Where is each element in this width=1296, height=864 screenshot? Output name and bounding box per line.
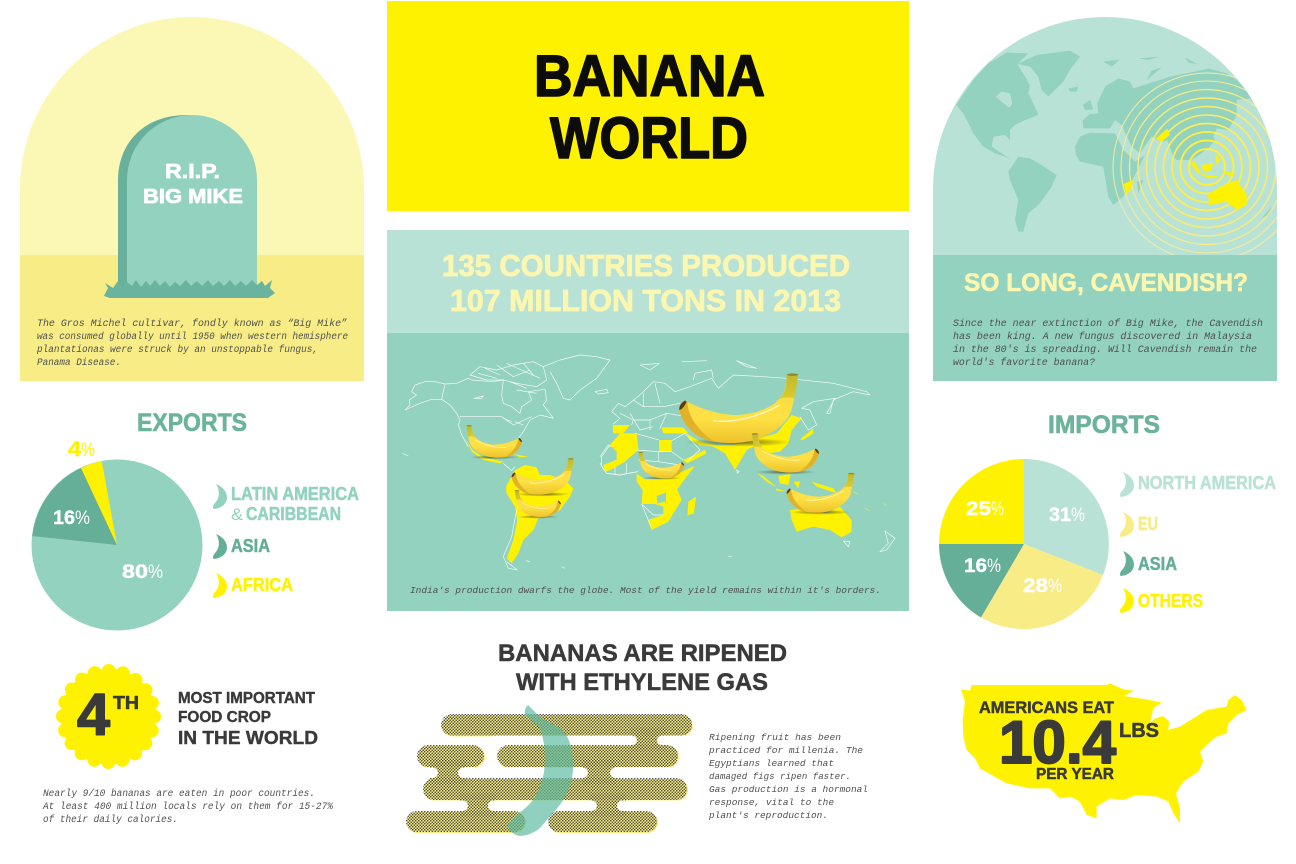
heading: ethylene: BANANAS ARE RIPENED [498, 640, 787, 667]
text: ripening: Gas production is a hormonal [709, 784, 868, 795]
panel: Cavendish [933, 17, 1296, 381]
text: ripening: response, vital to the [709, 797, 834, 808]
panel: Big Mike [20, 17, 364, 381]
icon: banana Indonesia [787, 473, 854, 515]
seal text: 4 [77, 682, 110, 748]
icon: banana South America [515, 490, 561, 519]
text: most important [178, 690, 318, 748]
heading: ethylene: WITH ETHYLENE GAS [516, 669, 768, 696]
icon: legend Latin America [213, 484, 227, 509]
pie chart: imports: 16 [964, 556, 987, 577]
seal text [77, 682, 139, 748]
legend: exports: ASIA [231, 536, 270, 556]
pie chart: exports: % [75, 508, 90, 529]
text: most important: MOST IMPORTANT [178, 690, 316, 707]
legend: exports: LATIN AMERICA [231, 484, 359, 504]
pie chart: imports: 28 [1023, 576, 1048, 597]
pie chart: imports: % [1048, 576, 1062, 597]
icon: legend North America [1120, 472, 1134, 497]
icon: banana silhouette [508, 705, 573, 836]
heading: production [442, 248, 850, 318]
text: Big Mike description: was consumed globally until 1950 when western hemisphere [37, 331, 348, 343]
globe arch [933, 17, 1296, 261]
text: Big Mike description: The Gros Michel cultivar, fondly known as “Big Mike” [37, 318, 348, 330]
text: ripening: Egyptians learned that [709, 758, 834, 769]
seal text: TH [113, 693, 139, 713]
panel: imports [939, 411, 1276, 629]
pie chart: imports: % [1071, 505, 1085, 526]
pie chart: exports: 80 [122, 562, 148, 583]
icon: banana Southeast Asia [752, 433, 819, 475]
tombstone text: R.I.P. [165, 161, 220, 183]
map: Africa hole [657, 493, 666, 503]
icon: legend Asia [213, 534, 227, 559]
icon: legend EU [1120, 512, 1134, 537]
legend: exports [213, 484, 359, 598]
text: Big Mike description: plantationas were struck by an unstoppable fungus, [36, 344, 318, 356]
map: western hemisphere [403, 355, 638, 570]
text: ripening [708, 732, 868, 821]
tombstone text: BIG MIKE [143, 186, 243, 208]
map: highlighted regions [1123, 128, 1247, 210]
text: Americans eat [979, 698, 1159, 783]
map: eastern hemisphere [602, 361, 895, 557]
text: Cavendish description [953, 318, 1263, 369]
panel: world production map [387, 230, 909, 611]
text: Americans eat: LBS [1119, 720, 1159, 742]
pie chart: imports [939, 459, 1109, 629]
map: Eurasia and Africa [1075, 57, 1272, 218]
text: Cavendish description: in the 80's is spreading. Will Cavendish remain the [953, 344, 1257, 356]
text: Americans eat: AMERICANS EAT [979, 698, 1115, 717]
text: most important: IN THE WORLD [178, 728, 318, 748]
pie chart: exports: 16 [53, 508, 75, 529]
pie chart: imports: % [987, 556, 1001, 577]
panel: exports [32, 409, 359, 630]
title panel [387, 1, 909, 211]
panel: Americans eat [961, 683, 1247, 823]
legend: exports: CARIBBEAN [246, 504, 341, 524]
map: Americas and Greenland [956, 51, 1093, 232]
map caption: India's production dwarfs the globe. Most of the yield remains within it's borders. [410, 585, 881, 596]
pie chart: imports: % [991, 499, 1004, 520]
text: Cavendish description: world's favorite banana? [953, 357, 1095, 369]
legend: imports: EU [1138, 514, 1158, 534]
heading: production: 135 COUNTRIES PRODUCED [442, 248, 850, 283]
tombstone text [143, 161, 243, 208]
pie chart: imports: 31 [1049, 505, 1071, 526]
map: USA [961, 683, 1247, 823]
pie chart: exports: % [148, 562, 163, 583]
pie chart: exports [32, 438, 202, 630]
text: ripening: Ripening fruit has been [709, 732, 841, 743]
heading: So long, Cavendish: SO LONG, CAVENDISH? [964, 269, 1248, 297]
title: WORLD [550, 106, 748, 171]
heading: production: 107 MILLION TONS IN 2013 [450, 283, 841, 318]
legend: exports: & [231, 505, 244, 524]
map: rings [1112, 72, 1277, 255]
band [933, 255, 1277, 381]
pie chart: imports: 25 [966, 499, 992, 520]
text: Americans eat: PER YEAR [1036, 766, 1114, 783]
panel ground [20, 255, 364, 381]
panel: ethylene [395, 640, 868, 836]
text: Big Mike description [36, 318, 348, 369]
legend: imports [1120, 472, 1276, 613]
icon: banana Brazil [512, 458, 574, 496]
text: Cavendish description: has been king. A new fungus discovered in Malaysia [953, 331, 1252, 343]
text: poor countries [42, 788, 334, 826]
text: ripening: damaged figs ripen faster. [709, 771, 851, 782]
panel sky arch [20, 17, 364, 255]
text: poor countries: Nearly 9/10 bananas are eaten in poor countries. [43, 788, 315, 800]
heading: exports: EXPORTS [137, 409, 247, 437]
heading: imports: IMPORTS [1048, 411, 1160, 439]
legend: imports: ASIA [1138, 554, 1177, 574]
pie chart: exports: % [81, 440, 95, 461]
text: Big Mike description: Panama Disease. [37, 357, 121, 369]
text: Cavendish description: Since the near extinction of Big Mike, the Cavendish [953, 318, 1263, 330]
panel: fourth crop [42, 668, 334, 826]
icon: legend Asia [1120, 551, 1134, 576]
text: poor countries: At least 400 million locals rely on them for 15-27% [42, 801, 334, 813]
text: poor countries: of their daily calories. [43, 814, 178, 826]
icon: banana India [679, 373, 798, 447]
legend: exports: AFRICA [231, 575, 293, 595]
pie chart: exports: 4 [68, 438, 81, 461]
icon: seal [60, 668, 156, 764]
icon: tombstone [104, 115, 275, 298]
heading: ethylene [498, 640, 787, 696]
icon: legend Others [1120, 588, 1134, 613]
text: Americans eat: 10.4 [999, 709, 1117, 776]
legend: imports: NORTH AMERICA [1138, 473, 1276, 493]
icon: legend Africa [213, 573, 227, 598]
icon: gas clouds [395, 714, 710, 833]
text: ripening: plant's reproduction. [708, 810, 828, 821]
icon: banana North America [466, 425, 522, 459]
title [534, 44, 765, 171]
title: BANANA [534, 44, 765, 109]
icon: banana Africa [639, 452, 684, 480]
legend: imports: OTHERS [1138, 591, 1203, 611]
text: ripening: practiced for millenia. The [708, 745, 863, 756]
text: most important: FOOD CROP [178, 709, 271, 726]
